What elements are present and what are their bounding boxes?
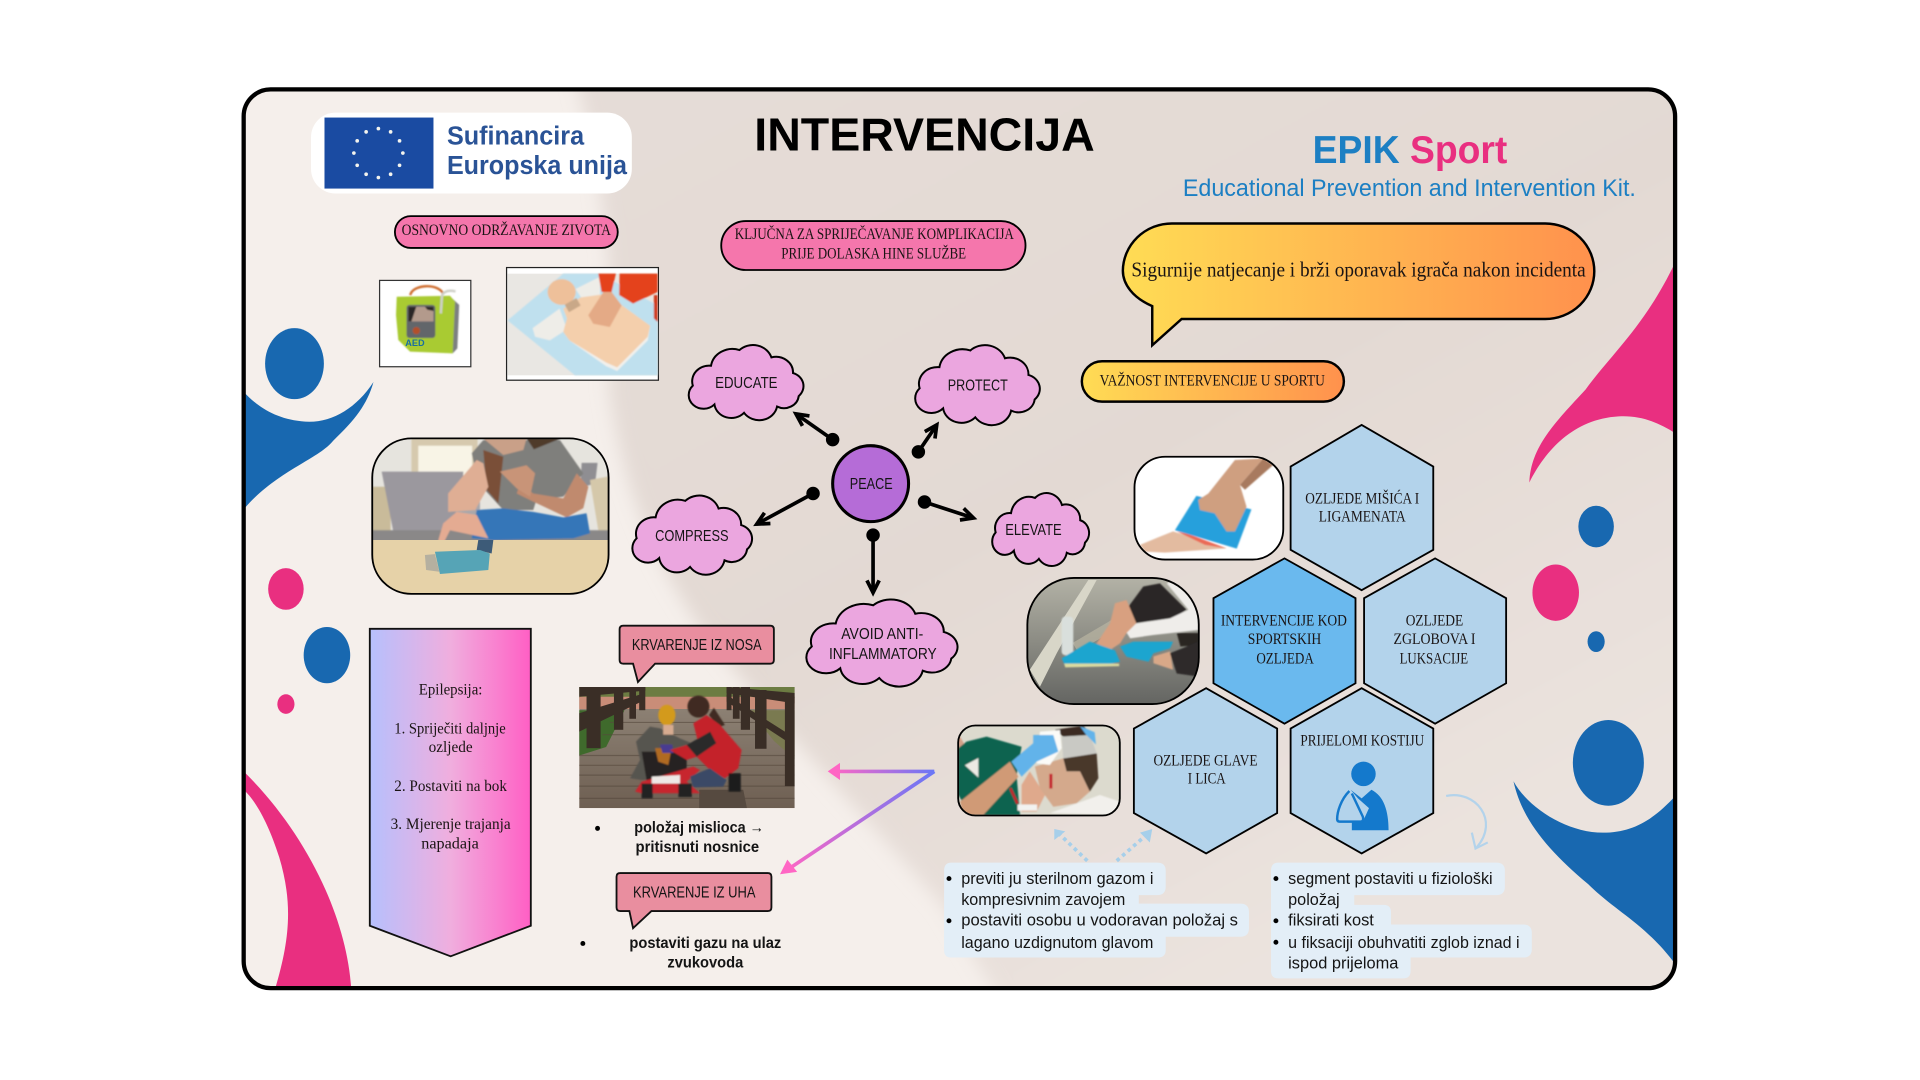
hexagon: muscle and ligament injuries: OZLJEDE MIŠIĆA I — [1305, 490, 1419, 507]
cloud: COMPRESS: COMPRESS — [655, 528, 729, 545]
logo text: Europska unija — [447, 152, 628, 180]
subheading: Educational Prevention and Intervention Kit. — [1183, 175, 1636, 202]
decoration: pink swoosh top right — [1529, 257, 1678, 482]
text block: head injury steps: previti ju sterilnom gazom i — [961, 869, 1153, 888]
node: PEACE: PEACE — [850, 476, 893, 493]
speech bubble: safer competition — [1123, 223, 1594, 345]
text block: fracture steps — [1271, 863, 1532, 978]
cloud: EDUCATE: EDUCATE — [715, 375, 778, 392]
icon: EU flag — [324, 118, 433, 189]
hexagon: sports injuries interventions: SPORTSKIH — [1248, 631, 1321, 648]
banner: epilepsy steps: ozljede — [429, 739, 473, 756]
callout: ear bleeding: KRVARENJE IZ UHA — [633, 885, 756, 902]
bullet text: ear bleeding: postaviti gazu na ulaz — [629, 935, 782, 952]
photo: AED device: AED — [405, 338, 425, 348]
text block: fracture steps: segment postaviti u fiziološki — [1288, 869, 1493, 888]
banner: epilepsy steps: napadaja — [421, 836, 479, 853]
callout: nosebleed: KRVARENJE IZ NOSA — [632, 637, 762, 654]
cloud: AVOID ANTI-INFLAMMATORY: INFLAMMATORY — [829, 646, 937, 663]
photo: CPR on manikin — [507, 268, 658, 380]
banner: epilepsy steps: Epilepsija: — [419, 681, 482, 698]
photo: head bandage — [958, 725, 1122, 817]
photo: woman reaching for inhaler — [372, 438, 609, 601]
text block: fracture steps: u fiksaciji obuhvatiti zglob iznad i — [1288, 933, 1520, 952]
decoration: dots left — [268, 568, 350, 714]
cloud: ELEVATE — [992, 493, 1089, 566]
arrow: curved to fracture list — [1446, 795, 1488, 849]
cloud: AVOID ANTI-INFLAMMATORY: AVOID ANTI- — [841, 626, 923, 643]
pill: key to preventing complications — [721, 221, 1026, 270]
logo text: Sufinancira — [447, 122, 585, 150]
arrow: to educate — [792, 409, 839, 446]
hexagon: bone fractures — [1291, 688, 1433, 853]
arrow: to elevate — [918, 495, 975, 524]
text block: head injury steps — [944, 863, 1249, 958]
arrow: to avoid anti-inflammatory — [866, 528, 880, 593]
cloud: EDUCATE — [689, 345, 803, 420]
hexagon: joint injuries and dislocations: OZLJEDE — [1406, 613, 1463, 630]
hexagon: head and face injuries: I LICA — [1188, 771, 1226, 788]
text block: head injury steps: kompresivnim zavojem — [961, 890, 1125, 909]
hexagon: bone fractures: PRIJELOMI KOSTIJU — [1300, 733, 1424, 750]
decoration: blue figure right — [1513, 720, 1678, 967]
hexagon: sports injuries interventions — [1213, 558, 1356, 724]
callout: ear bleeding — [617, 873, 771, 928]
bullet text: nosebleed: položaj mislioca → — [634, 820, 764, 837]
bullet text: nosebleed — [595, 820, 764, 856]
photo: ice pack on ankle — [1134, 457, 1283, 560]
decoration: pink swoosh bottom left — [244, 771, 351, 992]
pill: key to preventing complications: KLJUČNA ZA SPRIJEČAVANJE KOMPLIKACIJA — [735, 226, 1014, 243]
banner: epilepsy steps — [370, 629, 531, 956]
hexagon: head and face injuries: OZLJEDE GLAVE — [1153, 752, 1258, 769]
node: PEACE — [833, 446, 909, 522]
banner: epilepsy steps: 2. Postaviti na bok — [394, 778, 507, 795]
text block: fracture steps: ispod prijeloma — [1288, 954, 1399, 973]
panel: background — [246, 92, 1673, 986]
hexagon: muscle and ligament injuries: LIGAMENATA — [1319, 509, 1406, 526]
text block: head injury steps: postaviti osobu u vodoravan položaj s — [961, 911, 1238, 930]
arrows: gradient pointers — [780, 763, 934, 874]
speech bubble: safer competition: Sigurnije natjecanje i brži oporavak igrača nakon incidenta — [1131, 258, 1586, 282]
icon: person with arm sling — [1337, 762, 1389, 830]
hexagon: sports injuries interventions: OZLJEDA — [1256, 651, 1314, 668]
pill: importance of intervention — [1082, 361, 1344, 402]
arrow: to compress — [754, 487, 820, 529]
cloud: AVOID ANTI-INFLAMMATORY — [806, 599, 958, 687]
hexagon: muscle and ligament injuries — [1291, 425, 1433, 590]
logo text — [447, 122, 628, 180]
text block: fracture steps: fiksirati kost — [1288, 911, 1374, 930]
banner: epilepsy steps: 1. Spriječiti daljnje — [394, 720, 506, 737]
text block: head injury steps: lagano uzdignutom glavom — [961, 933, 1153, 952]
cloud: PROTECT — [915, 345, 1040, 425]
text block: fracture steps: položaj — [1288, 890, 1340, 909]
diagram: PEACE mind map — [632, 345, 1089, 687]
logo: EU co-funding — [311, 113, 632, 193]
heading: EPIK Sport: EPIK Sport — [1313, 129, 1507, 172]
bullet text: nosebleed: pritisnuti nosnice — [636, 839, 759, 856]
decoration: dots right — [1532, 506, 1614, 652]
bullet text: ear bleeding — [580, 935, 782, 971]
panel border — [244, 89, 1675, 988]
bullet text: ear bleeding: zvukovoda — [667, 954, 744, 971]
cloud: COMPRESS — [632, 496, 752, 575]
hexagon: joint injuries and dislocations: ZGLOBOVA I — [1393, 631, 1476, 648]
pill: importance of intervention: VAŽNOST INTERVENCIJE U SPORTU — [1100, 373, 1325, 390]
decoration: blue figure left — [244, 328, 373, 509]
pill: basic life support: OSNOVNO ODRŽAVANJE ZIVOTA — [402, 222, 611, 239]
pill: key to preventing complications: PRIJE DOLASKA HINE SLUŽBE — [781, 245, 966, 262]
cloud: PROTECT: PROTECT — [948, 378, 1008, 395]
hexagon: joint injuries and dislocations: LUKSACIJE — [1400, 651, 1468, 668]
hexagon: head and face injuries — [1134, 688, 1277, 853]
arrow: to protect — [912, 421, 942, 459]
callout: nosebleed — [620, 626, 774, 682]
photo: AED device — [380, 280, 471, 367]
pill: basic life support — [395, 216, 618, 248]
photo: nosebleed first aid — [579, 687, 795, 808]
photo: knee injury on road — [1027, 578, 1199, 704]
title: INTERVENCIJA — [754, 109, 1095, 161]
hexagon: joint injuries and dislocations — [1364, 558, 1506, 724]
hexagon: sports injuries interventions: INTERVENCIJE KOD — [1221, 613, 1347, 630]
arrow: dotted to head photo — [1054, 829, 1152, 861]
cloud: ELEVATE: ELEVATE — [1005, 522, 1062, 539]
banner: epilepsy steps: 3. Mjerenje trajanja — [391, 816, 511, 833]
